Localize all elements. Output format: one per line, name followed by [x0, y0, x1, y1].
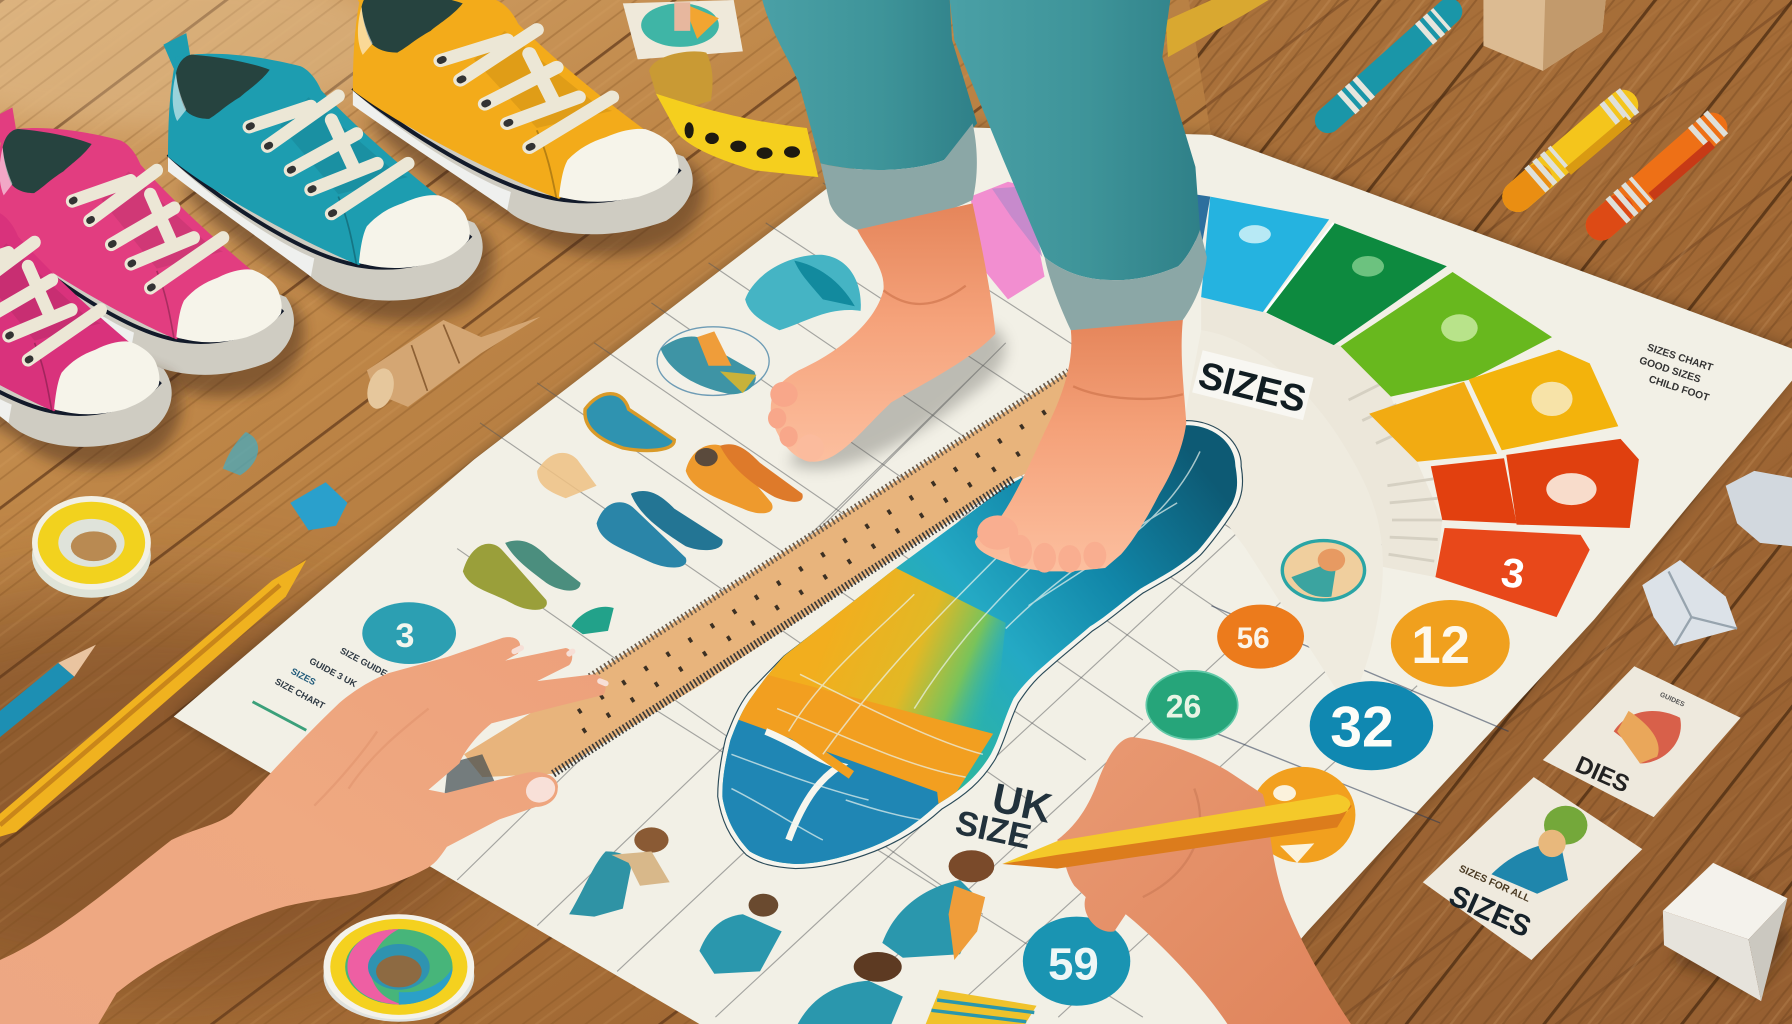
colour stripe bar [926, 990, 1037, 1024]
crayon: teal [1328, 11, 1449, 120]
icon: small teal shoe [585, 394, 674, 451]
blue smudge [223, 432, 258, 475]
size badge 12: 12 [1411, 616, 1470, 675]
small text block on paper: SIZE GUIDE [338, 646, 389, 679]
small text block top right [1633, 341, 1720, 404]
blue pencil [0, 645, 96, 737]
child's right foot [975, 320, 1186, 573]
tape roll: yellow [32, 496, 151, 598]
icon: small teal sock [571, 607, 614, 634]
size badge 26 [1146, 671, 1238, 739]
size badge 32 [1310, 681, 1433, 770]
crayon: yellow [1518, 98, 1632, 197]
small text block top right: SIZES CHART [1646, 342, 1715, 374]
figure icon 1 [569, 827, 670, 917]
shoe: yellow [348, 0, 704, 256]
shoe: pink front [0, 179, 182, 468]
figure icon 2 [699, 894, 782, 974]
child's left leg jeans [950, 0, 1207, 337]
shoe: pink back [0, 107, 304, 396]
card: SIZES: SIZES [1444, 879, 1536, 944]
card: DIES: GUIDES [1659, 691, 1686, 709]
size badge 59: 59 [1048, 938, 1099, 989]
heading: UK SIZES: UK [988, 774, 1056, 832]
card: DIES: DIES [1571, 751, 1633, 799]
small text block top right: GOOD SIZES [1638, 355, 1702, 386]
icon: orange shoes [686, 444, 803, 513]
size fan chart: 3 [1498, 549, 1527, 598]
pen [1002, 794, 1351, 869]
heading: SIZES: SIZES [1194, 353, 1310, 421]
size badge 26: 26 [1166, 689, 1201, 725]
small wooden peg [363, 317, 541, 412]
small text block on paper: SIZE CHART [273, 676, 327, 711]
size fan chart [970, 182, 1639, 709]
icon: blue shoes [597, 491, 723, 568]
size badge 59 [1023, 917, 1130, 1006]
card: SIZES [1423, 777, 1642, 960]
size badge 3: 3 [395, 617, 414, 655]
icon: multicolor shoe in circle [657, 327, 769, 395]
ruler [464, 371, 1077, 777]
child's right leg jeans [762, 0, 977, 230]
figure icon 4 [798, 952, 903, 1024]
shoe: teal [163, 33, 493, 322]
heading: UK SIZES [952, 768, 1056, 860]
size badge 12 [1391, 600, 1510, 687]
picture badge [1282, 541, 1365, 600]
white cube [1663, 863, 1792, 1001]
size badge 56: 56 [1237, 622, 1270, 655]
figure icon 3 [882, 850, 994, 960]
size chart paper [174, 126, 1792, 1024]
teal eraser [290, 482, 347, 530]
small picture card at top [623, 0, 743, 59]
small text block on paper: GUIDE 3 UK [308, 656, 359, 689]
icon: green-yellow shoes [463, 540, 581, 610]
yellow pencil [0, 560, 306, 837]
small text block on paper: SIZES [289, 666, 317, 687]
card: SIZES: SIZES FOR ALL [1457, 864, 1532, 905]
child's left foot [768, 203, 1006, 469]
wooden block top right [1483, 0, 1606, 71]
card: DIES [1543, 666, 1741, 817]
tape measure [649, 0, 1269, 177]
small text block on paper [253, 646, 389, 730]
tape roll: rainbow [323, 914, 474, 1022]
icon: teal garment [745, 255, 861, 330]
size badge partly covered [1250, 767, 1355, 863]
crayon: orange [1601, 119, 1721, 225]
size badge 3 [362, 602, 456, 664]
heading: UK SIZES: SIZE [952, 804, 1034, 857]
crumpled paper 1 [1726, 471, 1792, 546]
crumpled paper 2 [1642, 560, 1737, 646]
small text block top right: CHILD FOOT [1647, 374, 1711, 404]
adult's left hand on ruler [0, 637, 606, 1024]
foot outline insole [717, 420, 1244, 870]
size badge 32: 32 [1330, 695, 1394, 759]
icon: faded shoe [537, 453, 597, 498]
size badge 56 [1217, 605, 1304, 669]
adult's right hand with pen [1057, 737, 1351, 1024]
